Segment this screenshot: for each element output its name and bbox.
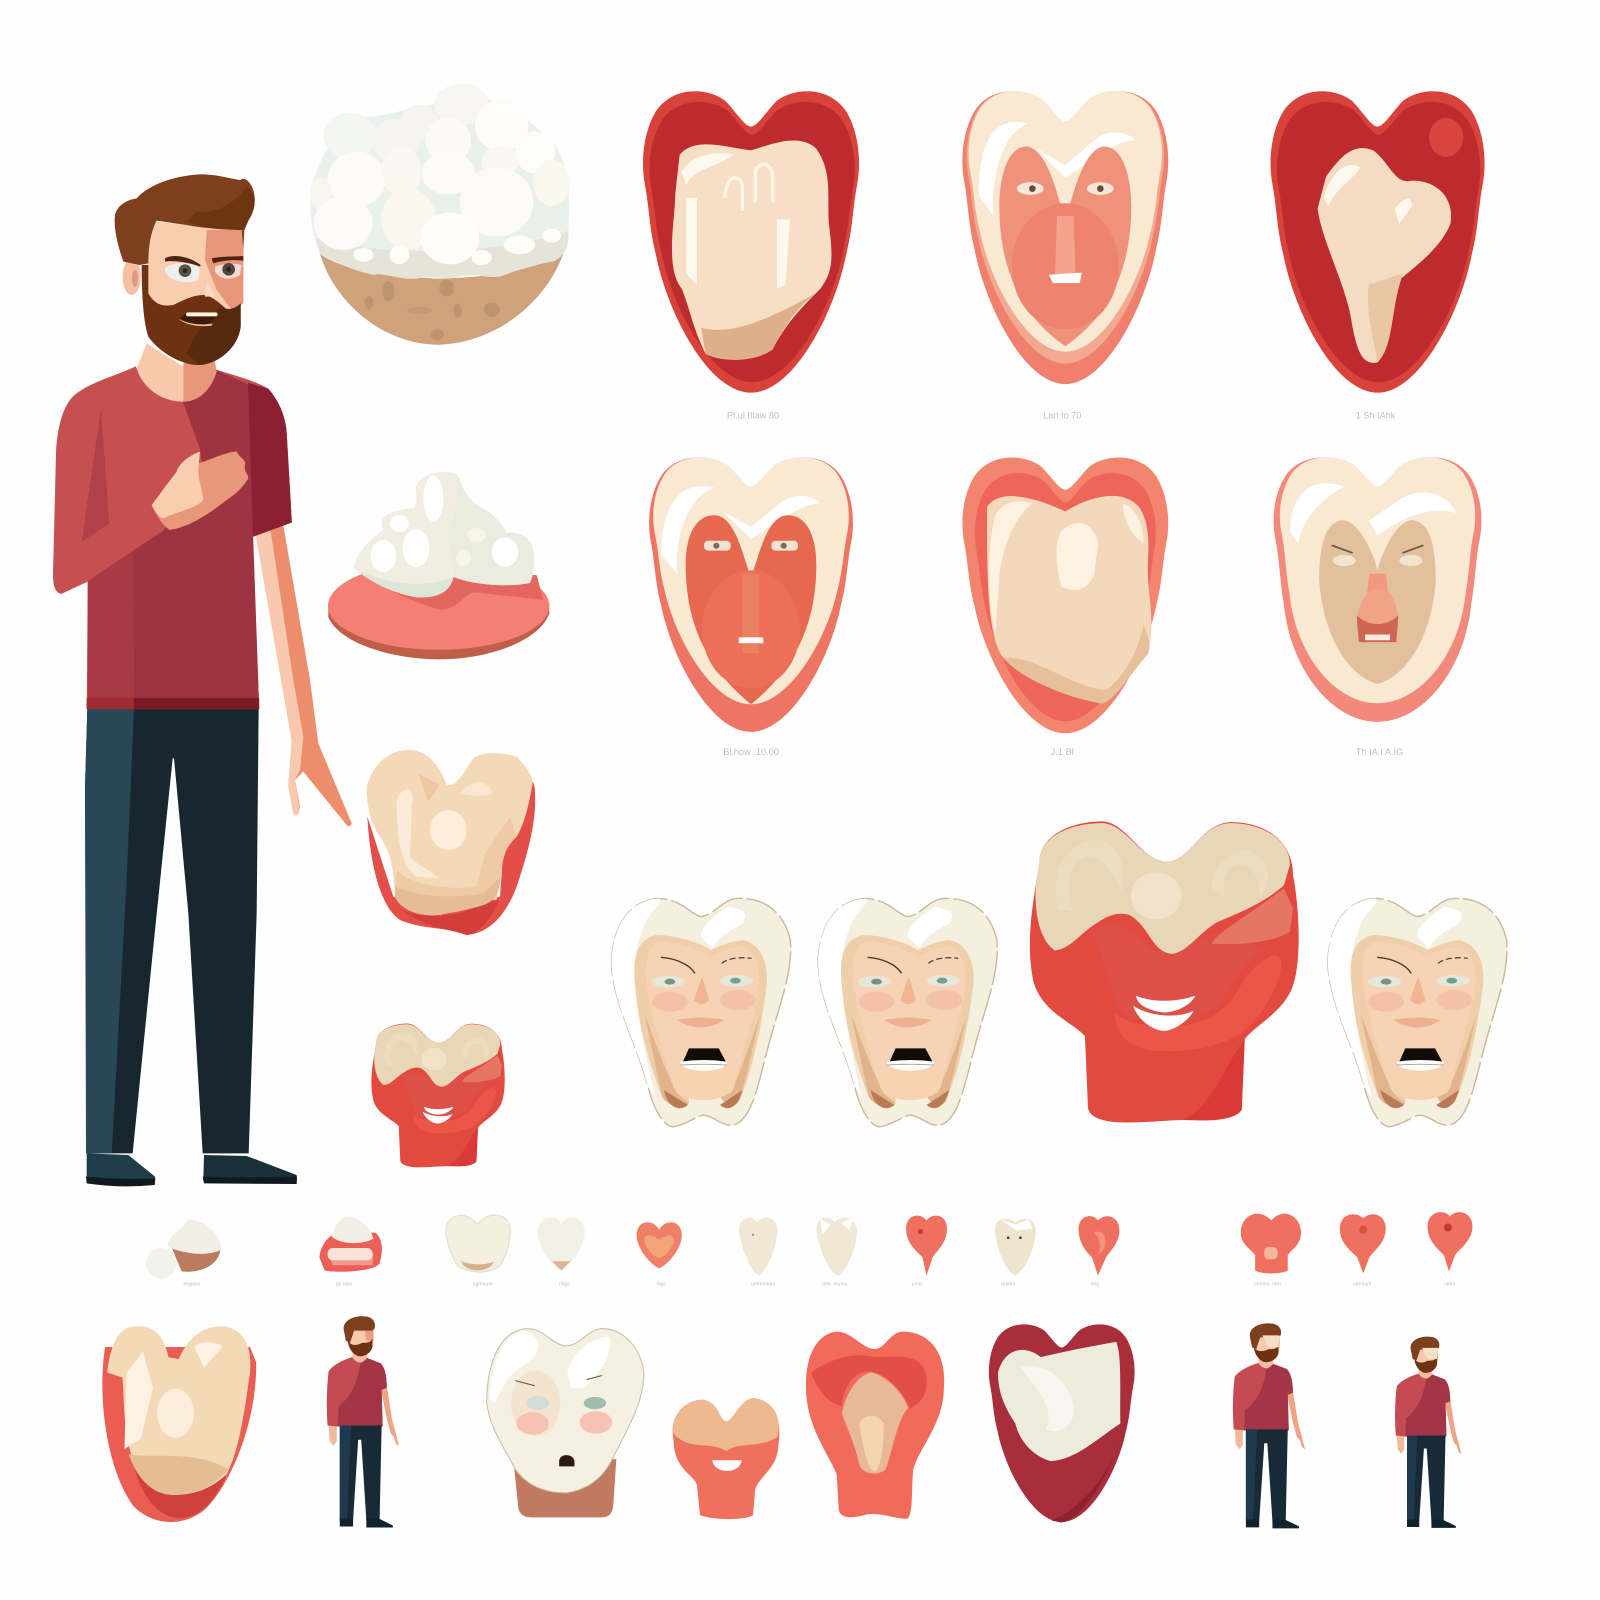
mini row labels: mm. mumu xyxy=(822,1282,848,1288)
bottom row: small man 1 xyxy=(327,1316,399,1528)
small red-rooted molar xyxy=(367,750,535,935)
bottom row: dark red gum with white tooth xyxy=(989,1324,1135,1522)
tooth with old face, left xyxy=(611,898,791,1127)
bottom row: orange throat tooth xyxy=(673,1398,779,1519)
mini row labels: pp ulus xyxy=(336,1282,353,1288)
bottom row: small man 3 with blotched face xyxy=(1395,1337,1461,1528)
man: shirt xyxy=(53,366,292,709)
man: head and upper detail xyxy=(115,174,255,530)
mini: root tooth 1 xyxy=(739,1218,778,1276)
mini: red root tooth 2 xyxy=(1079,1216,1119,1276)
mini: white tooth xyxy=(538,1217,585,1270)
tooth with old face, right xyxy=(1328,898,1507,1127)
white ball cluster in bowl xyxy=(310,83,570,345)
bottom row: red tooth with tan centre xyxy=(806,1332,944,1519)
top row tooth 3: red gum with bone-shaped tooth xyxy=(1271,91,1485,393)
mini row labels: umm xyxy=(912,1282,923,1288)
bottom row: cream molar in red gum xyxy=(102,1326,256,1522)
mini row labels: rings xyxy=(559,1282,570,1288)
row labels under teeth: 1 Sh IAhk xyxy=(1356,410,1396,420)
row labels under teeth: J.1 Bl xyxy=(1051,747,1074,757)
mini: gum with cream xyxy=(319,1216,382,1272)
second row tooth 1: cream tooth with red face xyxy=(649,457,853,732)
mini: orange heart xyxy=(637,1222,682,1268)
mini row labels: ugmnum xyxy=(473,1282,493,1288)
row of miniature teeth xyxy=(146,1212,1472,1279)
cream blobs on pink dish xyxy=(328,472,549,659)
row labels under teeth: Th IA.I A.IG xyxy=(1356,747,1403,757)
top row tooth 2: cream tooth with pink face xyxy=(962,91,1168,384)
second row tooth 3: cream tooth with tan face and open mouth xyxy=(1274,457,1481,722)
mini row labels: umnnmum xyxy=(751,1282,775,1288)
mini row labels: ummm. mm xyxy=(1254,1282,1281,1288)
mini: cream tooth xyxy=(446,1215,510,1272)
large standing man with hand on chest xyxy=(53,174,352,1186)
mini: red root tooth 4 xyxy=(1428,1212,1472,1271)
bottom row: small man 2 with blotched face xyxy=(1233,1323,1305,1528)
second row tooth 2: pink gum with cream tooth xyxy=(962,457,1168,733)
mini row labels xyxy=(183,1282,1458,1288)
large red throat tooth with smile xyxy=(1030,821,1299,1123)
mini row labels: umm . xyxy=(1444,1282,1458,1288)
row labels under teeth: Larl to 70 xyxy=(1043,410,1081,420)
mini row labels: unmm xyxy=(1001,1282,1015,1288)
mini: root tooth 2 xyxy=(816,1218,857,1276)
mini: flat throat tooth xyxy=(1241,1214,1301,1273)
row labels under teeth: Pl.ul IIlaw 80 xyxy=(727,410,779,420)
mini: red root tooth 3 xyxy=(1340,1214,1386,1273)
mini row labels: ring xyxy=(1091,1282,1099,1288)
mini: red root tooth 1 xyxy=(906,1216,947,1276)
mini row labels: ings xyxy=(657,1282,666,1288)
mini row labels: regions xyxy=(183,1282,201,1288)
tooth with old face, middle xyxy=(818,898,997,1127)
mini row labels: ummum xyxy=(1353,1282,1371,1288)
row labels under teeth: Bl.how .10.00 xyxy=(723,747,779,757)
mini: cream face tooth xyxy=(995,1219,1036,1276)
man: trousers, arm and shoes xyxy=(85,523,352,1186)
bottom row: tooth with face on brown root xyxy=(487,1329,644,1517)
small throat tooth xyxy=(371,1023,505,1167)
top row tooth 1: red gum with cream tooth xyxy=(643,91,859,393)
row labels under teeth xyxy=(723,410,1403,757)
mini: ball with brown cup xyxy=(146,1219,221,1279)
